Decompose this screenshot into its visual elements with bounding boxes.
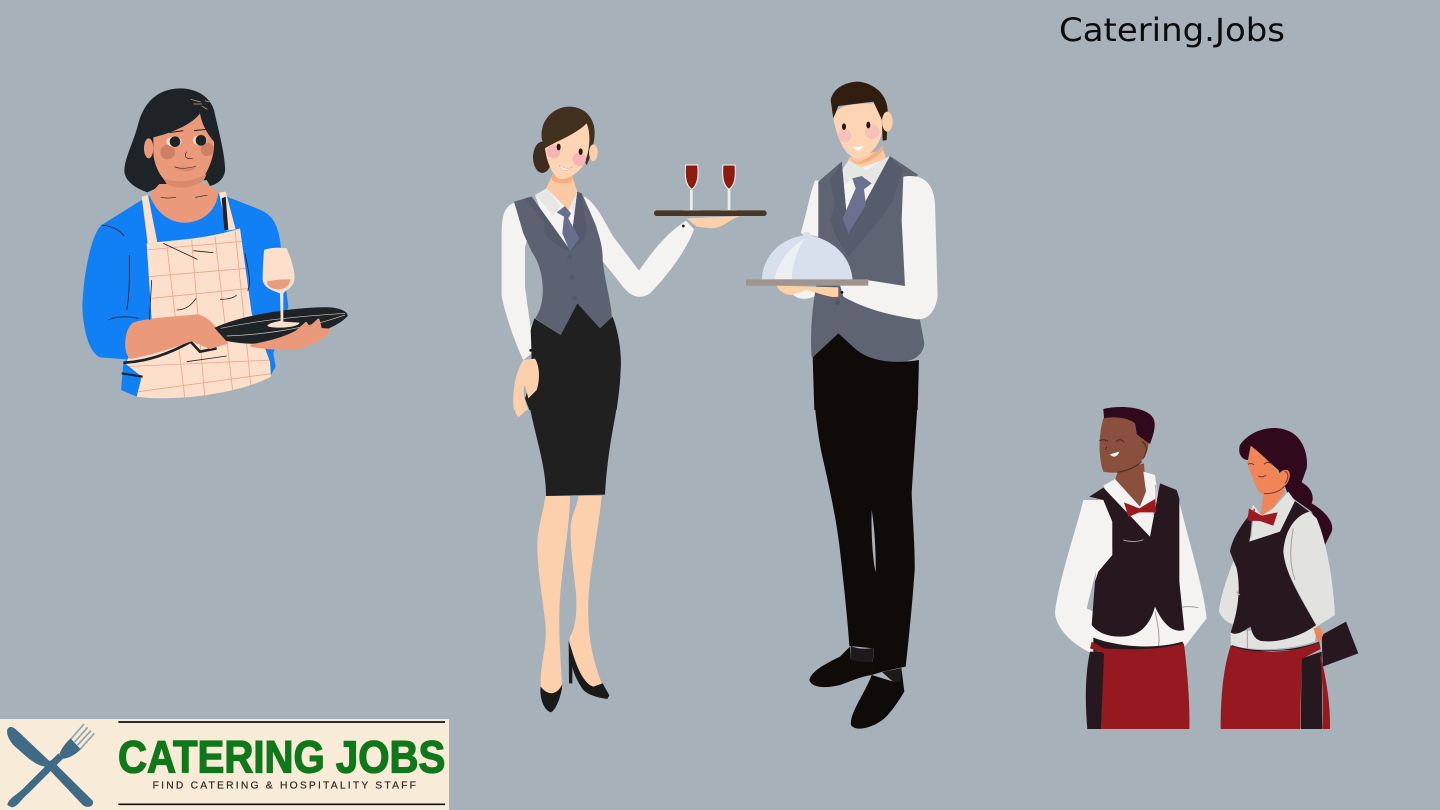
wine glasses: [683, 165, 737, 212]
cuffs: [529, 225, 685, 352]
logo background: [0, 719, 449, 810]
vest: [514, 192, 612, 335]
face: [1100, 417, 1149, 473]
mouth and nose: [174, 152, 196, 168]
hair bun: [533, 142, 552, 173]
face lines: [1099, 440, 1146, 472]
hair: [1103, 407, 1155, 444]
hand under tray: [252, 320, 330, 348]
face: [153, 113, 214, 187]
hair parting: [191, 99, 209, 109]
tie: [557, 206, 579, 252]
smile: [853, 146, 863, 150]
apron: [125, 228, 271, 398]
apron checks: [123, 230, 273, 400]
shirt fold: [1237, 508, 1295, 648]
vest: [1089, 483, 1184, 637]
plate: [746, 279, 868, 286]
neck: [546, 175, 577, 210]
socks: [850, 646, 902, 683]
ear: [882, 112, 893, 132]
fork tines: [71, 724, 94, 749]
skirt hem: [528, 399, 618, 496]
fold lines: [102, 225, 249, 362]
arm holding tray: [126, 315, 227, 358]
resting hand: [513, 359, 539, 410]
eyes: [557, 144, 583, 155]
chin shade: [552, 174, 573, 183]
cheeks: [547, 145, 586, 166]
ear: [144, 138, 153, 158]
right sleeve raised to tray: [583, 196, 694, 297]
chin shade: [163, 174, 207, 188]
logo: Catering Jobs banner: [0, 719, 449, 810]
legs: [537, 496, 602, 694]
hand: [777, 286, 838, 297]
logo tagline: FIND CATERING & HOSPITALITY STAFF: [153, 780, 416, 791]
skirt band: [1232, 642, 1320, 653]
face: [545, 123, 589, 179]
far sleeve: [801, 181, 821, 237]
neck creases: [161, 195, 207, 198]
hair: [1239, 428, 1332, 545]
wine glass: [263, 248, 299, 328]
neck and chest: [149, 184, 218, 223]
hair: [542, 107, 595, 165]
neck: [1261, 485, 1285, 516]
cloche: [762, 232, 853, 282]
shirt front and collar: [535, 188, 581, 250]
ear: [589, 144, 598, 161]
red apron: [1221, 642, 1321, 729]
blue shirt: [82, 193, 288, 397]
figure: waitress serving wine on tray: [502, 107, 767, 410]
eyes: [166, 135, 207, 147]
logo name: CATERING JOBS: [118, 732, 445, 783]
waitress: [1219, 428, 1358, 729]
chin shade: [849, 145, 883, 164]
hand: [1313, 627, 1323, 643]
face lines: [1248, 462, 1288, 494]
trousers: [813, 333, 919, 410]
front shoe: [540, 684, 562, 712]
brows: [169, 129, 207, 133]
figure: waitress lower body: [513, 399, 618, 712]
hair: [831, 82, 888, 141]
folder: [1322, 622, 1358, 667]
shirt: [1055, 472, 1207, 653]
vest: [811, 156, 924, 362]
shirt and collar: [839, 160, 890, 233]
trousers: [814, 399, 918, 675]
face: [1247, 446, 1290, 494]
figure: waiter and waitress with red aprons: [1055, 407, 1358, 729]
shirt fold: [1123, 485, 1198, 648]
skirt: [525, 303, 621, 410]
near sleeve: [840, 176, 938, 319]
logo rules: [118, 722, 445, 804]
hand fingers: [513, 399, 527, 417]
apron straps: [142, 192, 236, 243]
vest buttons: [567, 254, 577, 300]
shirt: [1219, 492, 1335, 649]
fingers over tray: [183, 316, 228, 348]
neck: [840, 150, 890, 202]
left sleeve: [502, 202, 535, 360]
smile: [1110, 452, 1119, 457]
title: Catering.Jobs: [1059, 11, 1285, 49]
arm shadow: [123, 342, 217, 363]
figure: waiter carrying cloche: [746, 82, 938, 410]
shoes: [809, 647, 904, 729]
tray: [213, 307, 348, 344]
button and cuff: [841, 291, 843, 294]
back shoe: [569, 641, 609, 699]
hair: [124, 88, 225, 192]
tie: [843, 176, 872, 233]
cutlery: [7, 727, 93, 807]
belt and apron: [1093, 638, 1183, 652]
gap between legs: [872, 510, 876, 573]
eyes: [842, 122, 870, 130]
bow tie: [1124, 499, 1156, 517]
figure: cook in apron holding tray and wine glass: [82, 88, 348, 400]
waiter: [1055, 407, 1207, 729]
serving hand: [687, 216, 741, 228]
bow tie: [1247, 508, 1278, 526]
smile: [559, 165, 572, 170]
cheeks: [160, 143, 214, 159]
cheeks: [838, 124, 880, 142]
figure: waiter lower body: [809, 399, 918, 729]
tray: [654, 210, 767, 216]
vest: [1230, 501, 1316, 641]
face: [833, 103, 882, 159]
neck: [1115, 463, 1146, 507]
icon: crossed knife and fork: [7, 724, 94, 807]
